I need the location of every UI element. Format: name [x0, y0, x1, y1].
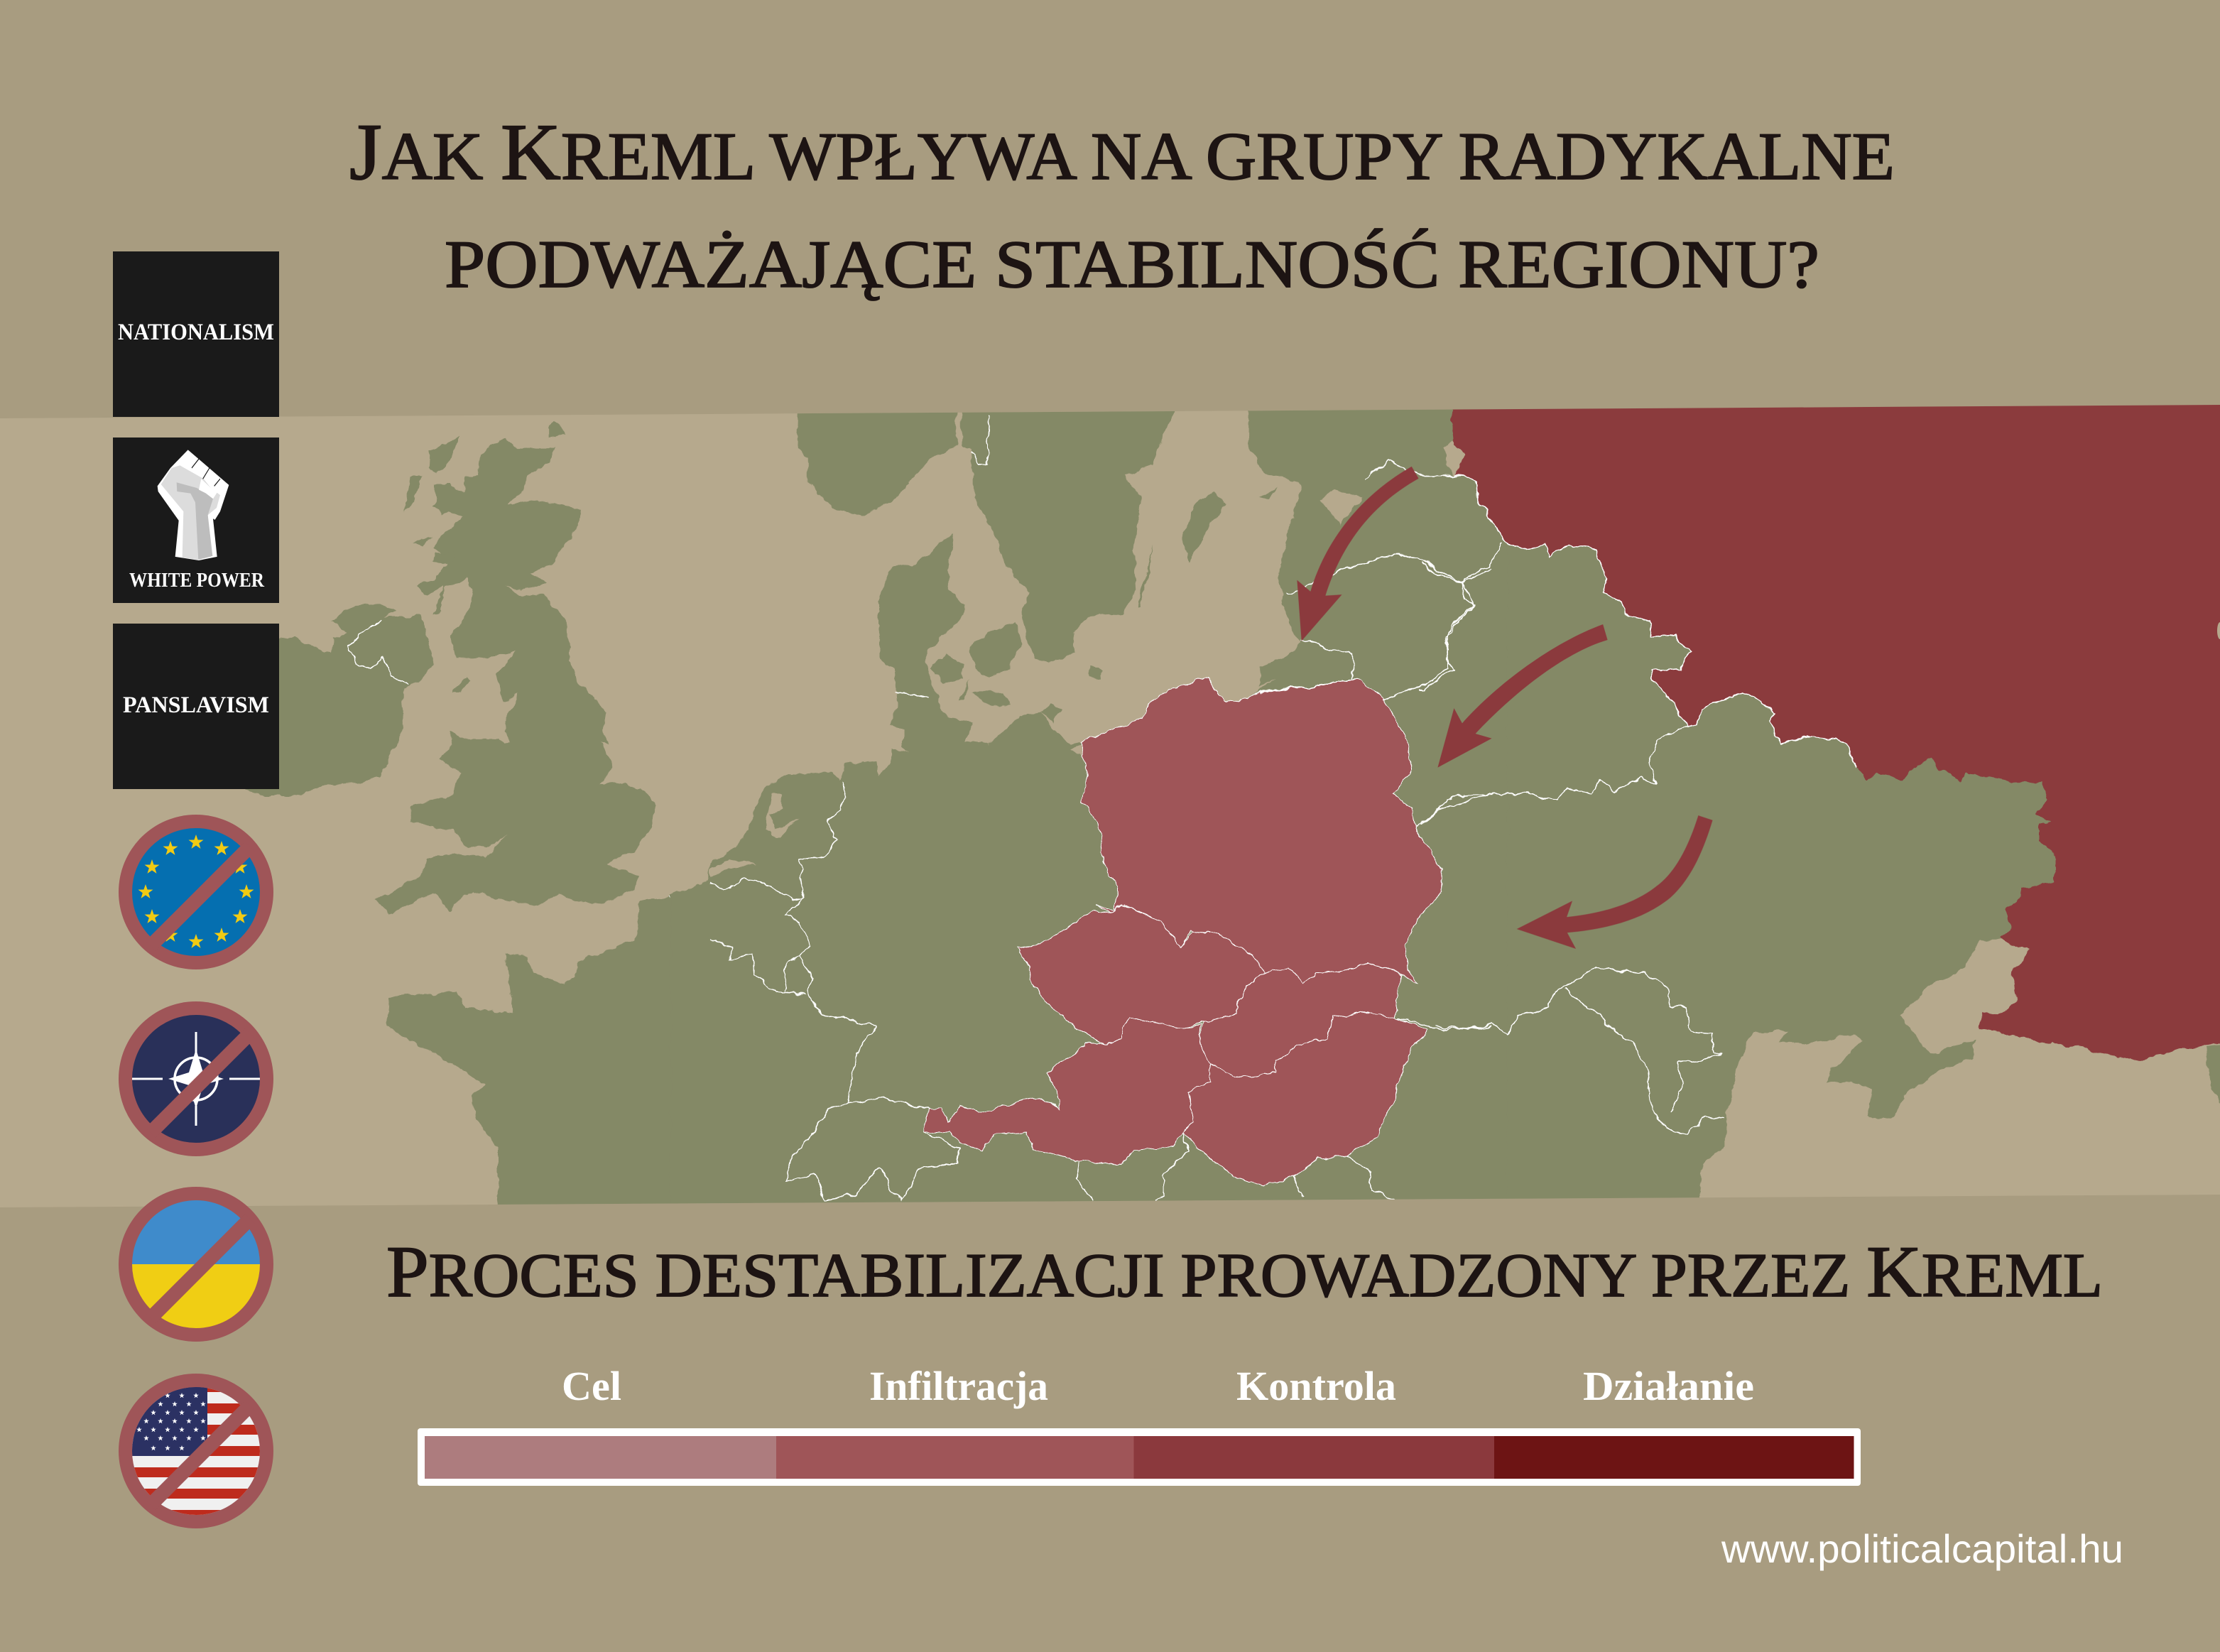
Poland — [1082, 678, 1442, 984]
national borders — [1420, 475, 1856, 1134]
land: mainland coast — [669, 409, 1418, 1202]
Slovakia — [1198, 963, 1403, 1077]
Czech Republic — [1019, 906, 1266, 1043]
water: Lake Peipus — [1443, 440, 1467, 475]
water: inland lakes and gulfs — [710, 489, 1363, 877]
arrow: across Ukraine towards the west — [1517, 815, 1712, 949]
arrow: from the Baltic towards Kaliningrad — [1297, 467, 1419, 641]
Austria — [925, 1018, 1211, 1165]
legend label: Działanie: Działanie — [1583, 1363, 1754, 1409]
icon card: panslavism: PANSLAVISM — [123, 692, 269, 718]
icon card: nationalism — [113, 251, 279, 417]
arrow: across Belarus towards Poland — [1437, 624, 1608, 768]
heading: destabilisation process: PROCES DESTABILIZACJI PROWADZONY PRZEZ KREML — [386, 1232, 2103, 1313]
national borders — [710, 413, 1491, 1200]
icon: crossed out US flag — [119, 1374, 273, 1528]
icon: raised fist — [158, 450, 229, 560]
land: Ukraine, Belarus, Romania — [1505, 543, 2056, 1199]
icon card: white power: WHITE POWER — [129, 569, 265, 592]
icon: crossed out NATO flag — [119, 1001, 273, 1156]
source URL: www.politicalcapital.hu — [1721, 1526, 2123, 1571]
legend bar — [418, 1428, 1861, 1486]
icon card: white power — [113, 438, 279, 603]
map: central and northern Europe — [670, 387, 1507, 1221]
icon card: nationalism: NATIONALISM — [118, 320, 274, 345]
title line 1: JAK KREML WPŁYWA NA GRUPY RADYKALNE — [349, 108, 1895, 197]
icon: crossed out Ukrainian flag — [119, 1187, 273, 1342]
title line 2: PODWAŻAJĄCE STABILNOŚĆ REGIONU? — [445, 227, 1819, 302]
legend label: Infiltracja: Infiltracja — [869, 1363, 1048, 1409]
small notch on the eastern edge — [2217, 622, 2220, 639]
map: eastern Europe — [1420, 387, 2220, 1134]
map panel — [0, 387, 2220, 1222]
map geography — [224, 387, 2220, 1221]
Hungary — [1183, 1012, 1427, 1187]
icon card: panslavism — [113, 624, 279, 789]
map: British Isles and France — [245, 420, 708, 1205]
legend label: Cel: Cel — [562, 1363, 621, 1409]
Russia — [1451, 387, 2220, 1060]
legend label: Kontrola: Kontrola — [1236, 1363, 1396, 1409]
Caucasus coast — [2204, 1045, 2220, 1127]
land: Scandinavia and Baltic islands — [798, 387, 1278, 723]
icon: crossed out EU flag — [119, 815, 273, 969]
